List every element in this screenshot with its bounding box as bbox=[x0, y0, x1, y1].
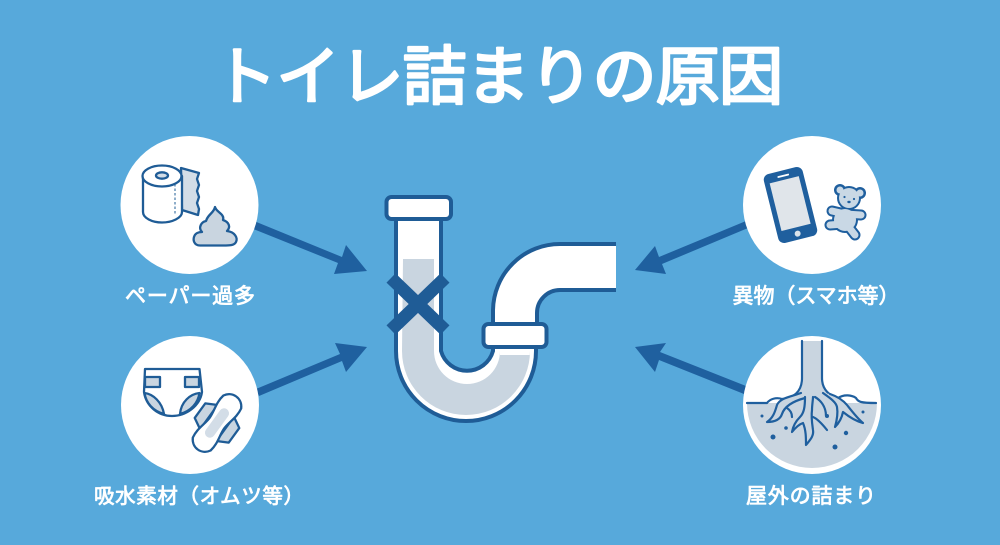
water blockage bbox=[402, 259, 530, 415]
icon: toilet paper roll bbox=[142, 166, 199, 222]
arrow: outdoor to pipe bbox=[635, 343, 746, 394]
soil bbox=[747, 403, 877, 468]
icon: smartphone bbox=[763, 166, 818, 244]
circle bbox=[743, 336, 881, 474]
icon: waste bbox=[194, 207, 237, 246]
panel: absorbent materials bbox=[94, 336, 304, 508]
pipe: collar bbox=[484, 324, 546, 347]
pipe: top cap bbox=[386, 197, 451, 219]
icon: sanitary pad bbox=[181, 384, 253, 462]
panel: drain trap pipe bbox=[386, 197, 616, 421]
label: 異物（スマホ等） bbox=[732, 285, 900, 308]
arrow: paper to pipe bbox=[251, 221, 367, 274]
arrow: diaper to pipe bbox=[256, 343, 367, 396]
panel: foreign objects bbox=[732, 136, 900, 308]
trunk bbox=[789, 341, 835, 403]
panel: outdoor blockage bbox=[743, 336, 881, 508]
label: ペーパー過多 bbox=[125, 285, 255, 308]
soil particles bbox=[760, 410, 864, 450]
arrow: foreign objects to pipe bbox=[635, 221, 748, 274]
title: トイレ詰まりの原因 bbox=[213, 41, 783, 113]
label: 屋外の詰まり bbox=[746, 485, 876, 508]
icon: diaper bbox=[144, 369, 202, 416]
pipe: upper elbow bbox=[493, 244, 616, 325]
circle bbox=[743, 136, 881, 274]
circle bbox=[121, 336, 259, 474]
icon: teddy bear bbox=[830, 184, 866, 235]
label: 吸水素材（オムツ等） bbox=[94, 485, 304, 508]
pipe: vertical section and U-bend bbox=[396, 218, 536, 421]
icon: cross bbox=[391, 278, 445, 330]
icon: roots bbox=[747, 341, 876, 445]
panel: excess paper bbox=[120, 136, 258, 308]
circle bbox=[120, 136, 258, 274]
